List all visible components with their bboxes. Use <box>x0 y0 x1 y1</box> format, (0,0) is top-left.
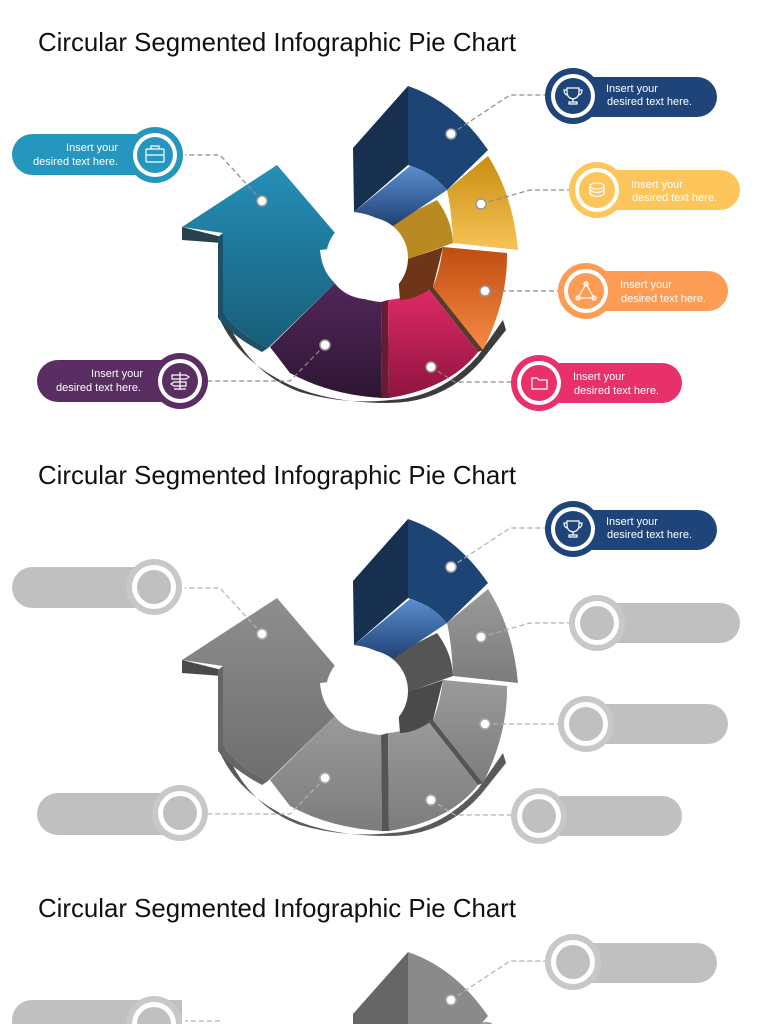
label: navy trophy: desired text here. <box>607 96 692 108</box>
label: navy trophy: Insert your <box>606 83 658 95</box>
label: purple signpost <box>37 353 208 409</box>
segment: navy block <box>353 86 488 228</box>
label: blue briefcase <box>12 127 183 183</box>
segment: yellow <box>383 156 518 263</box>
hole <box>326 217 408 299</box>
label: blue briefcase: desired text here. <box>33 156 118 168</box>
chart: gray with navy highlight <box>182 519 572 836</box>
label: orange network: desired text here. <box>621 293 706 305</box>
label: pink folder: Insert your <box>573 371 625 383</box>
label: pink folder <box>511 355 682 411</box>
label: purple signpost: Insert your <box>91 368 143 380</box>
chart: colored segmented arrow <box>182 86 572 403</box>
connectors <box>185 95 572 382</box>
label: orange network <box>558 263 728 319</box>
label: navy trophy section 2 <box>545 501 717 557</box>
label: navy trophy section 2: Insert your <box>606 516 658 528</box>
segment: teal arrow <box>182 165 347 352</box>
dots <box>257 129 490 372</box>
segment: purple <box>270 283 382 398</box>
icon: briefcase <box>146 146 164 162</box>
label: yellow coins: Insert your <box>631 179 683 191</box>
segment: pink <box>381 287 478 398</box>
label: yellow coins <box>569 162 740 218</box>
segment: orange <box>397 247 507 352</box>
icon: signpost <box>171 372 189 390</box>
label: orange network: Insert your <box>620 279 672 291</box>
chart: all gray (cut off) <box>185 952 548 1024</box>
icon: coins <box>590 183 604 196</box>
label: navy trophy section 2: desired text here. <box>607 529 692 541</box>
label: blue briefcase: Insert your <box>66 142 118 154</box>
bottom dark rim <box>218 300 506 403</box>
icon: network <box>576 282 596 300</box>
icon: trophy <box>564 521 582 537</box>
gray placeholder labels section 3 <box>12 934 717 1024</box>
gray placeholder labels section 2 <box>12 559 740 844</box>
icon: trophy <box>564 88 582 104</box>
label: yellow coins: desired text here. <box>632 192 717 204</box>
label: pink folder: desired text here. <box>574 385 659 397</box>
title: section 2: Circular Segmented Infographic Pie Chart <box>38 460 517 490</box>
label: purple signpost: desired text here. <box>56 382 141 394</box>
icon: folder <box>532 378 547 389</box>
title: section 1: Circular Segmented Infographic Pie Chart <box>38 27 517 57</box>
title: section 3: Circular Segmented Infographic Pie Chart <box>38 893 517 923</box>
label: navy trophy <box>545 68 717 124</box>
